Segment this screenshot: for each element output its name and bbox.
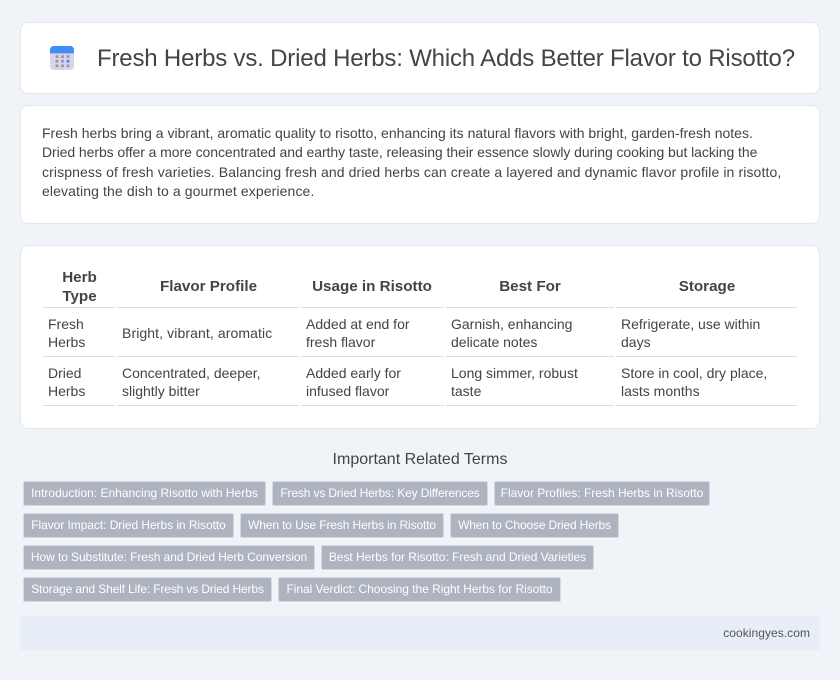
intro paragraph: crispness of fresh varieties. Balancing fresh and dried herbs can create a layered and dynamic flavor profile in risotto, xyxy=(42,164,781,180)
table header: flavor profile: Flavor Profile xyxy=(160,278,257,295)
dried storage: Store in cool, dry place, xyxy=(621,365,767,381)
dried best for: Long simmer, robust xyxy=(451,365,578,381)
tag xyxy=(450,513,619,538)
tag: Flavor Impact: Dried Herbs in Risotto xyxy=(31,518,226,532)
row: dried herbs: Herbs xyxy=(48,383,85,399)
tag xyxy=(23,577,272,602)
footer source text: cookingyes.com xyxy=(723,626,810,640)
related terms heading: Important Related Terms xyxy=(333,451,507,468)
fresh best for: Garnish, enhancing xyxy=(451,316,572,332)
fresh storage: days xyxy=(621,334,651,350)
tag: How to Substitute: Fresh and Dried Herb Conversion xyxy=(31,550,307,564)
fresh usage xyxy=(306,316,410,350)
dried storage xyxy=(621,365,767,399)
fresh usage: Added at end for xyxy=(306,316,410,332)
fresh storage: Refrigerate, use within xyxy=(621,316,760,332)
dried flavor xyxy=(122,365,261,399)
tag xyxy=(278,577,561,602)
intro paragraph: Fresh herbs bring a vibrant, aromatic quality to risotto, enhancing its natural flavors with bright, garden-fresh notes. xyxy=(42,125,753,141)
table header: storage: Storage xyxy=(679,278,735,295)
row: fresh herbs xyxy=(48,316,85,350)
fresh best for: delicate notes xyxy=(451,334,537,350)
tag xyxy=(23,513,234,538)
tag xyxy=(23,545,315,570)
tag: Flavor Profiles: Fresh Herbs in Risotto xyxy=(501,486,703,500)
table header: herb type: Herb xyxy=(62,269,97,286)
tag xyxy=(272,481,488,506)
table header: herb type xyxy=(62,269,97,305)
header panel xyxy=(20,22,820,94)
comparison table panel xyxy=(20,245,820,429)
dried usage: Added early for xyxy=(306,365,401,381)
tag: When to Use Fresh Herbs in Risotto xyxy=(248,518,436,532)
intro paragraph: elevating the dish to a gourmet experience. xyxy=(42,183,314,199)
intro paragraph: Dried herbs offer a more concentrated and earthy taste, releasing their essence slowly during cooking but lacking the xyxy=(42,144,757,160)
tag: Final Verdict: Choosing the Right Herbs for Risotto xyxy=(286,582,553,596)
intro text panel xyxy=(20,105,820,224)
row: fresh herbs: Fresh xyxy=(48,316,84,332)
dried storage: lasts months xyxy=(621,383,700,399)
row: dried herbs xyxy=(48,365,85,399)
title: Fresh Herbs vs. Dried Herbs: Which Adds Better Flavor to Risotto? xyxy=(97,45,795,72)
footer bar xyxy=(20,616,820,650)
tag: Best Herbs for Risotto: Fresh and Dried Varieties xyxy=(329,550,586,564)
dried flavor: slightly bitter xyxy=(122,383,200,399)
icon: calendar xyxy=(50,46,74,70)
dried usage xyxy=(306,365,401,399)
fresh flavor: Bright, vibrant, aromatic xyxy=(122,325,272,341)
fresh usage: fresh flavor xyxy=(306,334,375,350)
dried best for xyxy=(451,365,578,399)
dried usage: infused flavor xyxy=(306,383,389,399)
table header: usage in risotto: Usage in Risotto xyxy=(312,278,432,295)
table header: herb type: Type xyxy=(62,288,97,305)
fresh best for xyxy=(451,316,572,350)
row: dried herbs: Dried xyxy=(48,365,81,381)
tag: When to Choose Dried Herbs xyxy=(458,518,611,532)
related terms tags xyxy=(23,481,710,602)
tag xyxy=(494,481,710,506)
tag xyxy=(321,545,594,570)
dried flavor: Concentrated, deeper, xyxy=(122,365,261,381)
row: fresh herbs: Herbs xyxy=(48,334,85,350)
tag: Fresh vs Dried Herbs: Key Differences xyxy=(280,486,480,500)
tag xyxy=(23,481,266,506)
dried best for: taste xyxy=(451,383,481,399)
fresh storage xyxy=(621,316,760,350)
intro paragraph xyxy=(42,125,781,199)
tag xyxy=(240,513,444,538)
tag: Introduction: Enhancing Risotto with Herbs xyxy=(31,486,258,500)
table header: best for: Best For xyxy=(499,278,561,295)
tag: Storage and Shelf Life: Fresh vs Dried Herbs xyxy=(31,582,264,596)
